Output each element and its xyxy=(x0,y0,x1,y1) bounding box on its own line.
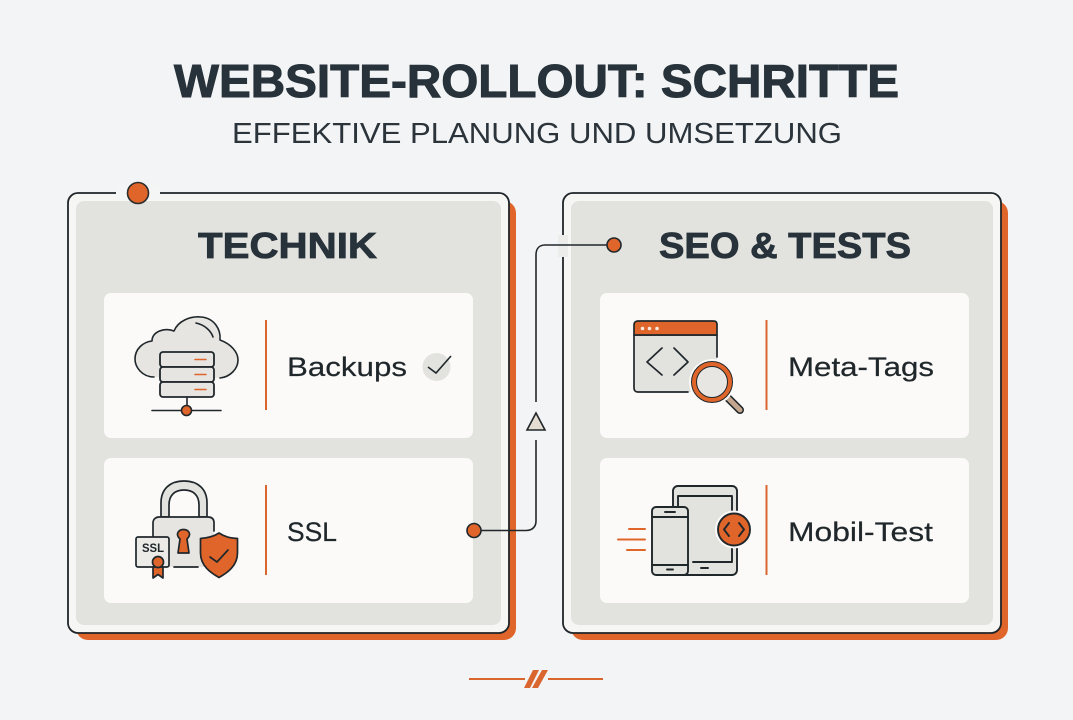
divider xyxy=(265,485,267,575)
shield xyxy=(200,533,238,578)
certificate: SSL xyxy=(142,541,164,555)
label: SSL: SSL xyxy=(287,517,337,547)
icon: check xyxy=(422,353,451,381)
footer ornament xyxy=(469,670,603,688)
icon: padlock with shield xyxy=(136,481,238,578)
padlock body xyxy=(153,517,214,567)
heading: SEO & Tests: SEO & TESTS xyxy=(659,225,911,266)
divider xyxy=(265,320,267,410)
connector arrow: SSL to SEO & Tests xyxy=(467,235,621,538)
divider xyxy=(766,485,768,575)
title: WEBSITE-ROLLOUT: SCHRITTE xyxy=(174,55,899,107)
card: Meta-Tags xyxy=(600,293,969,438)
divider xyxy=(766,320,768,410)
icon: phone and tablet xyxy=(618,486,753,575)
icon: code window with magnifier xyxy=(634,321,740,410)
keyhole xyxy=(178,530,190,553)
panel marker dot xyxy=(116,182,160,204)
start node xyxy=(467,524,481,538)
icon: cloud server xyxy=(135,317,238,416)
end node xyxy=(607,238,621,252)
card: SSL xyxy=(104,458,473,603)
label: Meta-Tags: Meta-Tags xyxy=(788,352,934,382)
panel: SEO & Tests xyxy=(563,193,1008,640)
padlock shackle xyxy=(161,481,207,517)
direction triangle xyxy=(527,413,545,430)
label: Backups: Backups xyxy=(287,352,407,382)
card: Backups xyxy=(104,293,473,438)
heading: Technik: TECHNIK xyxy=(198,225,377,266)
subtitle: EFFEKTIVE PLANUNG UND UMSETZUNG xyxy=(232,118,842,150)
card: Mobil-Test xyxy=(600,458,969,603)
label: Mobil-Test: Mobil-Test xyxy=(788,517,934,547)
panel: Technik xyxy=(68,182,516,640)
